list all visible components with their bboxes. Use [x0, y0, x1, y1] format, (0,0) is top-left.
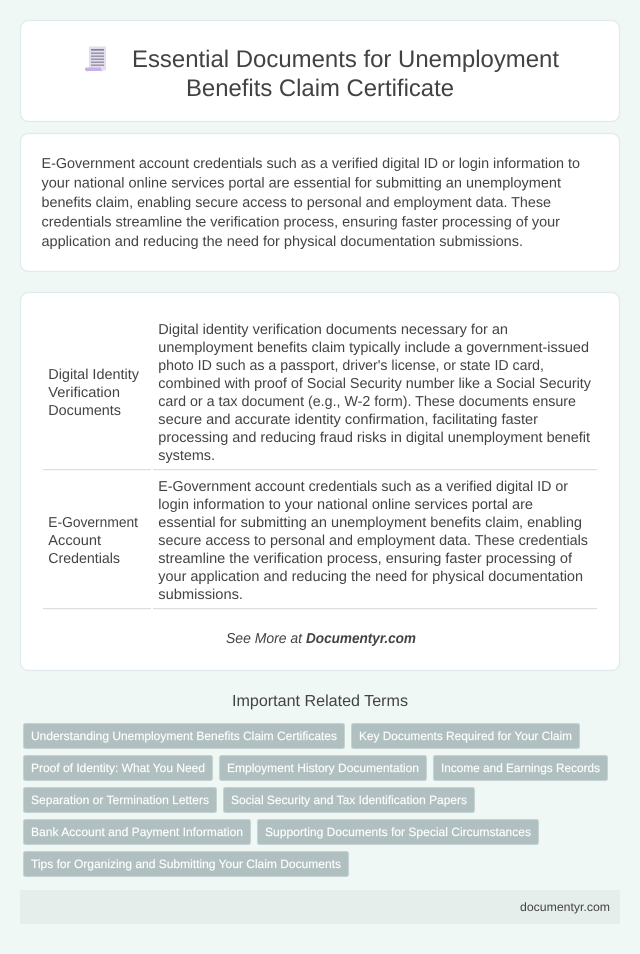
tag: [24, 788, 216, 812]
row label: E-Government: [48, 515, 138, 531]
row label: [48, 367, 140, 419]
row description: [158, 479, 588, 603]
row label: Account: [48, 533, 101, 549]
related terms tags: [24, 724, 608, 876]
heading: important related terms: Important Related Terms: [232, 693, 408, 710]
tag: Bank Account and Payment Information: [31, 825, 243, 839]
tag: [24, 820, 250, 844]
row description: login information to your national online services portal are: [158, 497, 533, 513]
tag: [24, 724, 344, 748]
panel: introduction: [20, 134, 620, 272]
text block: introduction: [42, 156, 580, 250]
text block: introduction: credentials streamline the verification process, ensuring faster processing of your: [42, 214, 560, 230]
row label: Digital Identity: [48, 367, 140, 383]
see more link: See More at: [226, 631, 303, 647]
row description: Digital identity verification documents necessary for an: [158, 322, 508, 338]
text block: introduction: your national online services portal are essential for submitting an unemployment: [42, 176, 561, 192]
row description: secure access to personal and employment data. These credentials: [158, 533, 588, 549]
row description: streamline the verification process, ensuring faster processing of: [158, 551, 573, 567]
text block: introduction: application and reducing the need for physical documentation submissions.: [42, 234, 523, 250]
tag: [258, 820, 538, 844]
text block: introduction: benefits claim, enabling secure access to personal and employment data. These: [42, 195, 551, 211]
panel: documents table: [20, 292, 620, 670]
table row: e-government account credentials: [43, 479, 597, 609]
row description: E-Government account credentials such as a verified digital ID or: [158, 479, 568, 495]
row description: unemployment benefits claim typically include a government-issued: [158, 340, 589, 356]
row label: [48, 515, 138, 567]
row description: submissions.: [158, 587, 243, 603]
row description: essential for submitting an unemployment benefits claim, enabling: [158, 515, 582, 531]
tag: [24, 756, 212, 780]
row description: photo ID such as a passport, driver's license, or state ID card,: [158, 358, 544, 374]
tag: Understanding Unemployment Benefits Claim Certificates: [31, 729, 337, 743]
tag: [24, 852, 348, 876]
footer: documentyr.com: [520, 900, 610, 914]
tag: Employment History Documentation: [227, 761, 419, 775]
title: Essential Documents for Unemployment: [132, 46, 559, 73]
row description: [158, 322, 592, 464]
text block: introduction: E-Government account credentials such as a verified digital ID or login information to: [42, 156, 580, 172]
tag: [434, 756, 608, 780]
tag: [224, 788, 474, 812]
tag: Social Security and Tax Identification Papers: [231, 793, 467, 807]
tag: [352, 724, 580, 748]
tag: Proof of Identity: What You Need: [31, 761, 205, 775]
see more link: [226, 631, 416, 647]
title: [132, 46, 559, 102]
row description: systems.: [158, 448, 215, 464]
tag: [220, 756, 426, 780]
row description: your application and reducing the need for physical documentation: [158, 569, 583, 585]
row label: Verification: [48, 385, 120, 401]
title: Benefits Claim Certificate: [186, 75, 454, 102]
see more link: Documentyr.com: [306, 631, 416, 647]
tag: Tips for Organizing and Submitting Your Claim Documents: [31, 857, 341, 871]
tag: Key Documents Required for Your Claim: [359, 729, 572, 743]
header panel: [20, 20, 620, 122]
row label: Credentials: [48, 551, 120, 567]
row description: card or a tax document (e.g., W-2 form). These documents ensure: [158, 394, 576, 410]
tag: Separation or Termination Letters: [31, 793, 209, 807]
tag: Income and Earnings Records: [441, 761, 600, 775]
icon: document receipt: [85, 46, 106, 71]
row label: Documents: [48, 403, 121, 419]
row description: processing and reducing fraud risks in digital unemployment benefit: [158, 430, 590, 446]
footer: [20, 890, 620, 924]
row description: secure and accurate identity confirmation, facilitating faster: [158, 412, 538, 428]
tag: Supporting Documents for Special Circumstances: [265, 825, 531, 839]
table row: digital identity verification documents: [43, 322, 597, 470]
row description: combined with proof of Social Security number like a Social Security: [158, 376, 592, 392]
